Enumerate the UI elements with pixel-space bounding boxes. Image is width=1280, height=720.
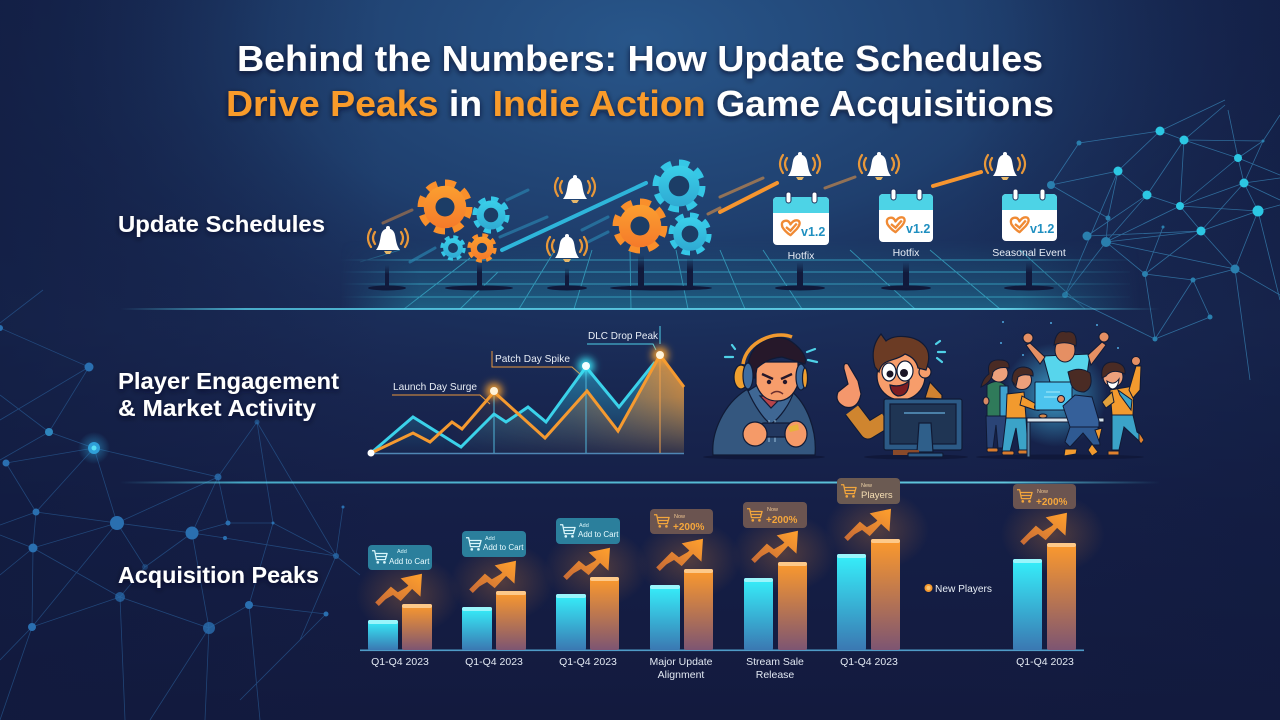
- axis labels: Q1-Q4 2023: [1016, 656, 1074, 668]
- calendar: Hotfix one: Hotfix: [788, 250, 815, 262]
- callout: Add to Cart 1: Add to Cart: [389, 557, 430, 566]
- title: Behind the Numbers: How Update Schedules: [237, 38, 1043, 79]
- calendar: Seasonal Event: Seasonal Event: [992, 247, 1066, 259]
- bars: Q1-Q4 2023 third: [556, 577, 619, 650]
- peak: Launch Day Surge: [392, 381, 502, 404]
- motion streaks: [383, 172, 981, 262]
- axis labels: Stream Sale: [746, 656, 804, 668]
- callout: Add to Cart 3: Add: [579, 523, 589, 529]
- section label: Player Engagement and Market Activity: & Market Activity: [118, 395, 316, 421]
- title: Drive Peaks in Indie Action Game Acquisitions: [226, 83, 1054, 124]
- icon: gears cluster one: [423, 185, 506, 260]
- callout: +200% A: +200%: [673, 522, 705, 533]
- axis labels: Release: [756, 669, 794, 681]
- bar chart: acquisition peaks: [356, 478, 1105, 681]
- callout: +200% B: +200%: [766, 515, 798, 526]
- callout: +200% B: Now: [767, 507, 778, 513]
- perspective grid floor: [346, 250, 1130, 310]
- section label: Acquisition Peaks: Acquisition Peaks: [118, 562, 319, 588]
- section label: Update Schedules: Update Schedules: [118, 211, 325, 237]
- callout: Add to Cart 3: Add to Cart: [578, 530, 619, 539]
- callout: +200% C: [1013, 484, 1076, 509]
- section label: Player Engagement and Market Activity: Player Engagement: [118, 368, 339, 394]
- calendar: Hotfix two: v1.2: [906, 222, 930, 236]
- bars: Q1-Q4 2023 sixth: [837, 539, 900, 650]
- illustration: excited player at monitor: [837, 334, 968, 460]
- calendar: Hotfix two: [879, 189, 933, 259]
- callout: Players: New: [861, 483, 872, 489]
- calendar: Hotfix two: Hotfix: [893, 247, 920, 259]
- calendar: Hotfix one: v1.2: [801, 225, 825, 239]
- panel: update schedule timeline: [340, 152, 1140, 309]
- network nodes: top right: [1047, 126, 1264, 342]
- callout: +200% C: Now: [1037, 489, 1048, 495]
- illustration: celebrating group of players: [976, 321, 1144, 460]
- calendar: Seasonal Event: v1.2: [1030, 222, 1054, 236]
- callout: +200% C: +200%: [1036, 497, 1068, 508]
- peak: Patch Day Spike: Patch Day Spike: [495, 353, 570, 365]
- seated player: [1058, 369, 1102, 456]
- callout: Players: Players: [861, 490, 893, 501]
- callout: Add to Cart 2: [462, 531, 526, 557]
- axis labels: Alignment: [658, 669, 704, 681]
- title: [226, 38, 1054, 124]
- line chart: player engagement: [368, 326, 684, 456]
- axis labels: Q1-Q4 2023: [559, 656, 617, 668]
- axis labels: Q1-Q4 2023: [465, 656, 523, 668]
- bars: Q1-Q4 2023 first: [368, 604, 432, 650]
- bar halos: [356, 490, 1105, 635]
- callout: Add to Cart 1: Add: [397, 549, 407, 555]
- illustration: focused gamer with headphones: [703, 335, 825, 460]
- bars: Stream Sale Release: [744, 562, 807, 650]
- callout: Add to Cart 2: Add: [485, 536, 495, 542]
- callout: +200% A: Now: [674, 514, 685, 520]
- bars: Q1-Q4 2023 seventh: [1013, 543, 1076, 650]
- peak: DLC Drop Peak: [587, 326, 668, 363]
- peak: Patch Day Spike: [492, 351, 594, 374]
- network: top right: [1051, 100, 1280, 380]
- poles and shadows: [368, 255, 1054, 290]
- callout: +200% B: [743, 502, 807, 528]
- icons: bells: [368, 152, 1025, 262]
- bars: Major Update Alignment: [650, 569, 713, 650]
- callout: Add to Cart 3: [556, 518, 620, 544]
- icon: gears cluster two: [618, 164, 708, 252]
- axis labels: Major Update: [649, 656, 713, 668]
- callout: +200% A: [650, 509, 713, 534]
- computer and table: [1027, 382, 1104, 457]
- section label: Player Engagement and Market Activity: [118, 368, 339, 421]
- network nodes: bottom left: [0, 325, 344, 634]
- cheering player on the right: [1102, 356, 1144, 455]
- axis labels: [371, 656, 1074, 681]
- child in orange: [1002, 367, 1042, 455]
- calendar: Hotfix one: [773, 192, 829, 262]
- peak: Launch Day Surge: Launch Day Surge: [393, 381, 477, 393]
- callout: Add to Cart 2: Add to Cart: [483, 543, 524, 552]
- arrows: rising trend: [377, 512, 1064, 604]
- woman in green jacket: [981, 360, 1009, 452]
- callout: Players: [837, 478, 900, 504]
- peak: DLC Drop Peak: DLC Drop Peak: [588, 330, 659, 342]
- axis labels: Q1-Q4 2023: [840, 656, 898, 668]
- raised arms figure: [1023, 332, 1109, 382]
- legend: New Players: New Players: [935, 584, 992, 595]
- callout: Add to Cart 1: [368, 545, 432, 570]
- bars: Q1-Q4 2023 second: [462, 591, 526, 650]
- network: bottom left: [0, 290, 360, 720]
- calendar: Seasonal Event: [992, 189, 1066, 259]
- axis labels: Q1-Q4 2023: [371, 656, 429, 668]
